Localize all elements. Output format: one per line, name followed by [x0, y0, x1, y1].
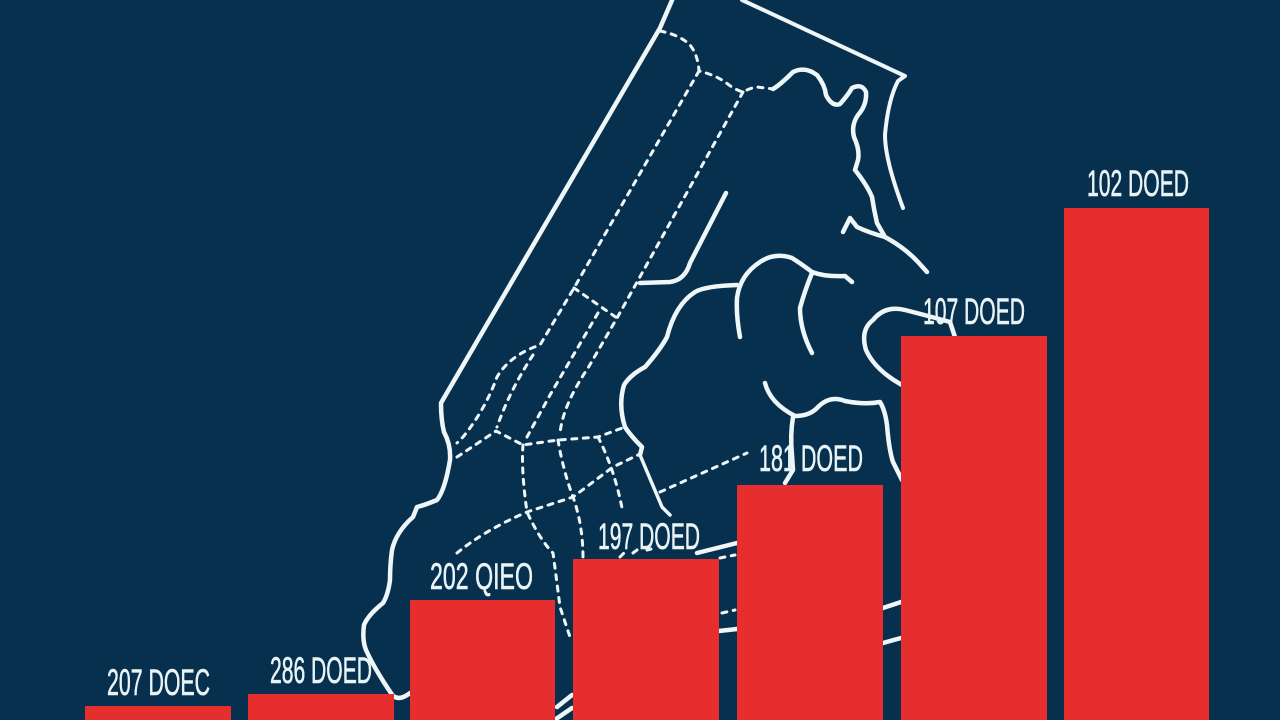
map: street outline — [363, 0, 955, 719]
bar 1 — [85, 706, 231, 720]
map: dashed street lines — [457, 31, 773, 637]
bar 2 — [248, 694, 394, 720]
label bar 2: 286 DOED — [270, 650, 372, 691]
bar 6 — [901, 336, 1047, 720]
label bar 3: 202 QIEO — [430, 556, 533, 597]
label bar 6: 107 DOED — [923, 291, 1025, 332]
bar 4 — [573, 559, 719, 720]
bar 7 — [1064, 208, 1209, 720]
label bar 7: 102 DOED — [1087, 163, 1189, 204]
label bar 4: 197 DOED — [598, 516, 700, 557]
bar value labels — [107, 163, 1189, 703]
label bar 5: 181 DOED — [759, 438, 863, 479]
label bar 1: 207 DOEC — [107, 662, 210, 703]
bar 5 — [737, 485, 883, 720]
bar chart — [85, 208, 1209, 720]
bar 3 — [410, 600, 555, 720]
map: solid coast and borough lines — [363, 0, 955, 719]
